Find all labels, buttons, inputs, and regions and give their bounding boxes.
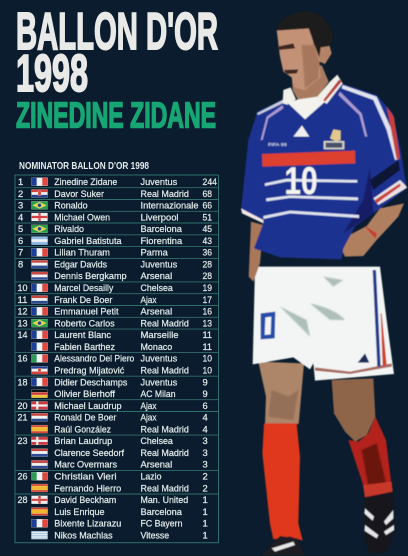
- row 12: Petit: 16: [202, 306, 212, 317]
- row 8: Davids: Edgar Davids: [54, 258, 107, 270]
- ear: [319, 45, 332, 64]
- row 10: Desailly: 19: [202, 282, 212, 293]
- neck: [292, 65, 329, 101]
- row 26: Vieri: Christian Vieri: [54, 470, 117, 482]
- subtitle: Zinedine Zidane: ZINEDINE ZIDANE: [16, 94, 216, 135]
- row 13: Carlos: Real Madrid: [140, 317, 189, 328]
- row 3: Ronaldo: Ronaldo: [54, 200, 88, 211]
- row 9: Bergkamp: [32, 270, 212, 281]
- row 10: Desailly: Marcel Desailly: [54, 282, 114, 293]
- left boot: [262, 536, 305, 555]
- row 9: Bergkamp: 28: [202, 270, 212, 281]
- row 24: Seedorf: [32, 447, 208, 458]
- row 22: Raul: [32, 423, 208, 434]
- row 9: Bergkamp: Dennis Bergkamp: [54, 270, 127, 281]
- row 8: Davids: 28: [202, 258, 212, 270]
- row 5: Rivaldo: [18, 223, 212, 234]
- row 26: Vieri: 2: [202, 470, 208, 482]
- undershirt: [287, 97, 325, 119]
- row 2: Suker: 68: [202, 188, 212, 199]
- row 5: Rivaldo: Barcelona: [140, 223, 183, 234]
- row 20: Michael Laudrup: 6: [202, 400, 208, 411]
- row 23: Brian Laudrup: Chelsea: [140, 435, 174, 446]
- left sock: [262, 423, 303, 541]
- row 8: Davids: Juventus: [140, 258, 177, 270]
- row 2: Suker: [18, 188, 212, 199]
- row 6: Batistuta: Gabriel Batistuta: [54, 235, 122, 246]
- row 16: Del Piero: 10: [202, 353, 212, 364]
- lower body: [253, 267, 395, 555]
- right boot: [364, 492, 395, 554]
- row 22: Raul: Real Madrid: [140, 423, 189, 434]
- row 21: Ronald De Boer: Ajax: [140, 412, 157, 423]
- row 14: Blanc: 14: [18, 329, 28, 340]
- row 16: Del Piero: Alessandro Del Piero: [54, 353, 134, 364]
- row 8: Davids: 8: [18, 258, 23, 270]
- row 21: Ronald De Boer: 21: [18, 412, 28, 423]
- France crest: [324, 129, 344, 149]
- row 12: Petit: Arsenal: [140, 306, 172, 317]
- row 7: Thuram: 36: [202, 247, 212, 258]
- ranking table: [15, 175, 218, 543]
- row 20: Michael Laudrup: Ajax: [140, 400, 157, 411]
- row 1: Zidane: 1: [18, 176, 23, 187]
- row 28: Beckham: 1: [202, 494, 208, 505]
- row 28: Beckham: 28: [18, 494, 28, 505]
- row 23: Brian Laudrup: 3: [202, 435, 208, 446]
- row 30: Lizarazu: [32, 518, 208, 529]
- row 2: Suker: 2: [18, 188, 23, 199]
- row 4: Owen: [18, 211, 212, 222]
- row 13: Carlos: Roberto Carlos: [54, 317, 115, 328]
- badge text: FIFA 98: [268, 142, 287, 148]
- jersey number 10: 10: [284, 159, 318, 203]
- row 9: Bergkamp: Arsenal: [140, 270, 172, 281]
- row 1: Zidane: Zinedine Zidane: [54, 176, 117, 187]
- row 12: Petit: 12: [18, 306, 28, 317]
- row 27: Hierro: 2: [202, 482, 208, 493]
- row 20: Michael Laudrup: 20: [18, 400, 28, 411]
- row 8: Davids: [18, 258, 212, 270]
- row 28: Beckham: Man. United: [140, 494, 188, 505]
- row 26: Vieri: [18, 470, 208, 482]
- row 21: Ronald De Boer: Ronald De Boer: [54, 412, 116, 423]
- row 19: Bierhoff: Olivier Bierhoff: [54, 388, 115, 399]
- row 19: Bierhoff: 9: [202, 388, 208, 399]
- row 16: Del Piero: [18, 353, 212, 364]
- row 13: Carlos: 13: [202, 317, 212, 328]
- row 2: Suker: Real Madrid: [140, 188, 189, 199]
- row 20: Michael Laudrup: [18, 400, 208, 411]
- row 3: Ronaldo: Internazionale: [140, 200, 198, 211]
- row 29: Enrique: 1: [202, 506, 208, 517]
- shorts number: [261, 312, 275, 339]
- row 24: Seedorf: 3: [202, 447, 208, 458]
- row 17: Mijatovic: Real Madrid: [140, 364, 189, 376]
- left arm: [249, 222, 263, 282]
- row 25: Overmars: 3: [202, 459, 208, 470]
- row 30: Lizarazu: Bixente Lizarazu: [54, 518, 121, 529]
- row 11: Frank De Boer: Ajax: [140, 294, 157, 305]
- table heading: NOMINATOR BALLON D'OR 1998: [19, 161, 149, 172]
- row 16: Del Piero: 16: [18, 353, 28, 364]
- row 15: Barthez: Monaco: [140, 341, 172, 352]
- player illustration: Zidane in France kit: [241, 11, 407, 555]
- row 7: Thuram: 7: [18, 247, 23, 258]
- row 5: Rivaldo: Rivaldo: [54, 223, 84, 234]
- row 17: Mijatovic: [32, 364, 212, 376]
- row 7: Thuram: Lilian Thuram: [54, 247, 110, 258]
- forearm and hand: [340, 203, 404, 257]
- row 23: Brian Laudrup: 23: [18, 435, 28, 446]
- row 6: Batistuta: Fiorentina: [140, 235, 183, 246]
- row 18: Deschamps: 18: [18, 376, 28, 387]
- row 31: Machlas: [32, 529, 208, 540]
- right leg skin: [332, 378, 375, 442]
- row 24: Seedorf: Clarence Seedorf: [54, 447, 124, 458]
- row 27: Hierro: [32, 482, 208, 493]
- row 10: Desailly: [18, 282, 212, 293]
- row 3: Ronaldo: 3: [18, 200, 23, 211]
- row 3: Ronaldo: 66: [202, 200, 212, 211]
- row 20: Michael Laudrup: Michael Laudrup: [54, 400, 122, 411]
- row 15: Barthez: Fabien Barthez: [54, 341, 115, 352]
- row 26: Vieri: 26: [18, 470, 28, 482]
- row 2: Suker: Davor Suker: [54, 188, 104, 199]
- row 14: Blanc: Laurent Blanc: [54, 329, 111, 340]
- row 7: Thuram: Parma: [140, 247, 169, 258]
- row 14: Blanc: 11: [202, 329, 212, 340]
- row 10: Desailly: 10: [18, 282, 28, 293]
- row 31: Machlas: 1: [202, 529, 208, 540]
- row 6: Batistuta: [18, 235, 212, 246]
- row 31: Machlas: Vitesse: [140, 529, 169, 540]
- row 31: Machlas: Nikos Machlas: [54, 529, 113, 540]
- row 25: Overmars: Arsenal: [140, 459, 172, 470]
- row 11: Frank De Boer: 17: [202, 294, 212, 305]
- row 29: Enrique: Luis Enrique: [54, 506, 105, 517]
- row 30: Lizarazu: 1: [202, 518, 208, 529]
- row 6: Batistuta: 43: [202, 235, 212, 246]
- row 4: Owen: 51: [202, 211, 212, 222]
- white stripes: [263, 179, 359, 219]
- row 19: Bierhoff: [32, 388, 208, 399]
- row 15: Barthez: [32, 341, 212, 352]
- row 11: Frank De Boer: 11: [18, 294, 28, 305]
- row 30: Lizarazu: FC Bayern: [140, 518, 182, 529]
- row 22: Raul: Raúl González: [54, 423, 111, 434]
- left leg skin: [258, 362, 304, 424]
- row 4: Owen: 4: [18, 211, 23, 222]
- title: Ballon d'Or 1998: [16, 3, 218, 103]
- row 21: Ronald De Boer: [18, 412, 208, 423]
- row 22: Raul: 4: [202, 423, 208, 434]
- red chest band: [262, 151, 355, 167]
- collar: [283, 75, 343, 105]
- row 18: Deschamps: [18, 376, 208, 387]
- row 10: Desailly: Chelsea: [140, 282, 174, 293]
- row 17: Mijatovic: Predrag Mijatović: [54, 364, 125, 376]
- row 18: Deschamps: Didier Deschamps: [54, 376, 128, 387]
- row 5: Rivaldo: 45: [202, 223, 212, 234]
- title: Ballon d'Or 1998: BALLON D'OR: [16, 3, 218, 61]
- row 7: Thuram: [18, 247, 212, 258]
- row 29: Enrique: Barcelona: [140, 506, 183, 517]
- row 29: Enrique: [32, 506, 208, 517]
- row 14: Blanc: [18, 329, 212, 340]
- row 1: Zidane: Juventus: [140, 176, 177, 187]
- shorts: [253, 267, 394, 381]
- row 25: Overmars: [32, 459, 208, 470]
- row 15: Barthez: 11: [202, 341, 212, 352]
- row 13: Carlos: [18, 317, 212, 328]
- jersey: [241, 83, 407, 259]
- row 18: Deschamps: 9: [202, 376, 208, 387]
- row 1: Zidane: [18, 176, 217, 187]
- row 13: Carlos: 13: [18, 317, 28, 328]
- sleeve cuffs: [241, 208, 263, 223]
- row 24: Seedorf: Real Madrid: [140, 447, 189, 458]
- row 18: Deschamps: Juventus: [140, 376, 177, 387]
- row 12: Petit: [18, 306, 212, 317]
- row 5: Rivaldo: 5: [18, 223, 23, 234]
- row 11: Frank De Boer: Frank De Boer: [54, 294, 112, 305]
- hair: [277, 11, 333, 57]
- upper body: [241, 11, 407, 282]
- adidas logo: [293, 125, 309, 137]
- row 25: Overmars: Marc Overmars: [54, 459, 117, 470]
- row 23: Brian Laudrup: [18, 435, 208, 446]
- row 14: Blanc: Marseille: [140, 329, 178, 340]
- row 11: Frank De Boer: [18, 294, 212, 305]
- shorts adidas logo: [358, 353, 369, 363]
- row 17: Mijatovic: 10: [202, 364, 212, 376]
- row 1: Zidane: 244: [202, 176, 217, 187]
- row 27: Hierro: Fernando Hierro: [54, 482, 121, 493]
- row 26: Vieri: Lazio: [140, 470, 162, 482]
- row 21: Ronald De Boer: 4: [202, 412, 208, 423]
- head: [277, 28, 321, 90]
- row 12: Petit: Emmanuel Petit: [54, 306, 119, 317]
- row 6: Batistuta: 6: [18, 235, 23, 246]
- row 3: Ronaldo: [18, 200, 212, 211]
- row 28: Beckham: [18, 494, 208, 505]
- row 23: Brian Laudrup: Brian Laudrup: [54, 435, 112, 446]
- right sock: [348, 417, 392, 497]
- row 27: Hierro: Real Madrid: [140, 482, 189, 493]
- row 4: Owen: Liverpool: [140, 211, 178, 222]
- eyebrows and mouth: [277, 43, 298, 74]
- row 4: Owen: Michael Owen: [54, 211, 110, 222]
- row 28: Beckham: David Beckham: [54, 494, 116, 505]
- row 16: Del Piero: Juventus: [140, 353, 177, 364]
- title: Ballon d'Or 1998: 1998: [16, 45, 88, 103]
- row 19: Bierhoff: AC Milan: [140, 388, 176, 399]
